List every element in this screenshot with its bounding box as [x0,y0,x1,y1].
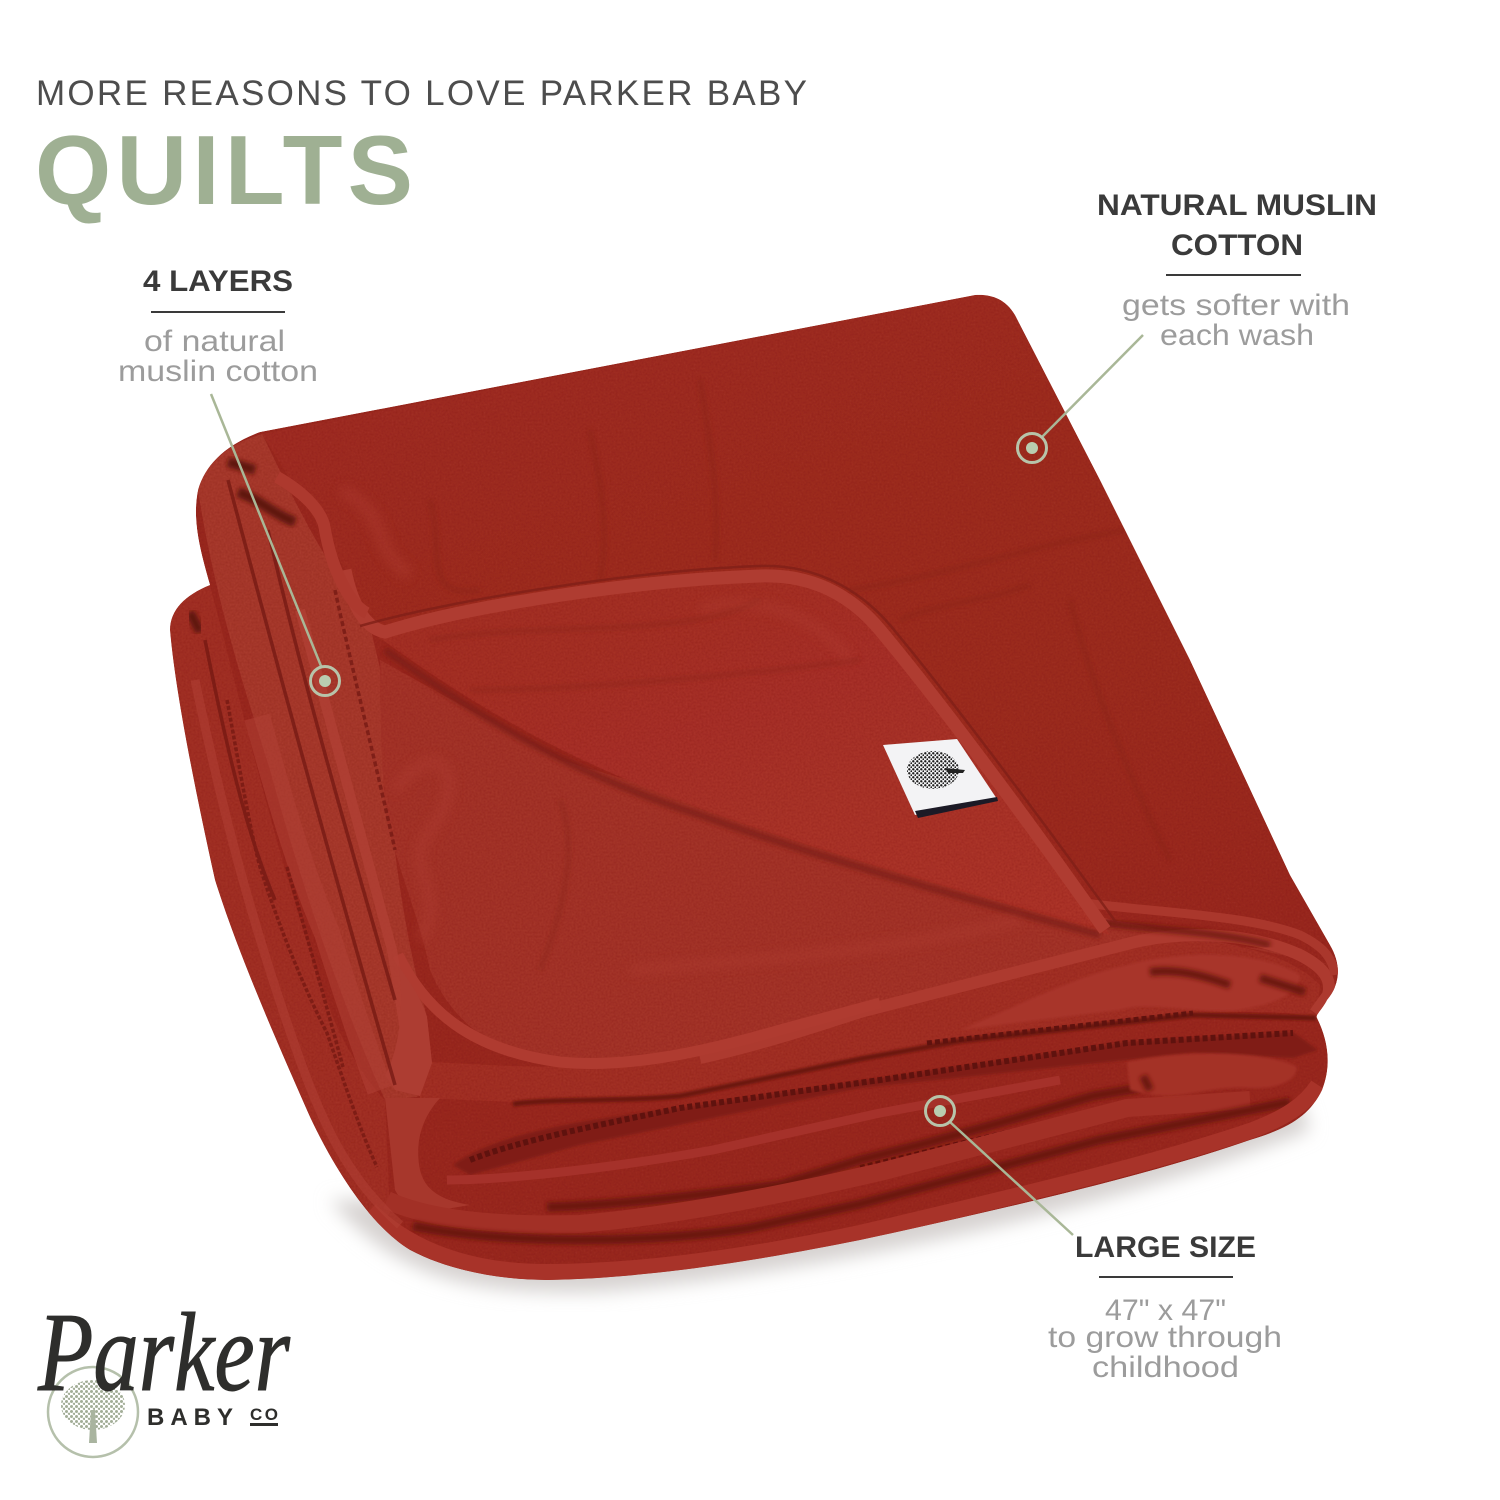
front fold piping [398,955,880,1064]
callout heading: LARGE SIZE [1075,1231,1256,1264]
flap piping seam [360,566,1118,925]
left stitched edge [277,477,367,613]
callout description: to grow through [1048,1321,1282,1354]
callout: large size [1048,1231,1282,1384]
shadow beneath flap [385,650,1100,935]
folded edge tab [385,965,432,1096]
title: quilts: QUILTS [35,115,413,225]
logo: Parker Baby Co [37,1291,290,1457]
top surface end piping [1085,903,1335,975]
logo circle [48,1367,138,1457]
loop shadows [1143,971,1305,1090]
folded flap [372,572,1110,935]
bottom hem [370,1085,1318,1272]
logo baby text: BABY [147,1404,233,1431]
callout description: gets softer with [1122,289,1350,322]
pointer: 4 layers [211,394,340,696]
left side layered edges [198,434,432,1100]
product image: folded red muslin quilt [170,295,1338,1292]
upper fold cavity [453,1032,1318,1175]
upper left fold cavity [228,462,295,522]
shadow below top end piping [1100,922,1270,945]
lower left fold stack [170,585,400,1225]
callout description: 47" x 47" [1105,1294,1226,1327]
label tag [883,739,997,815]
puckered ridges [340,490,1020,970]
blanket shadow [330,1100,1310,1292]
callout description: each wash [1160,319,1314,352]
label tag fold [915,797,998,818]
lower left fold cavity [190,612,200,632]
blanket clipped to silhouette [170,295,1338,1280]
callout description: muslin cotton [118,355,318,388]
left edge lighter bands [195,610,405,1225]
lower dark crease [547,1088,1140,1207]
bottom dark crease [413,1102,1290,1240]
callout heading: 4 LAYERS [143,265,293,298]
upper dark seam shadow [513,1015,1316,1104]
pointer: natural muslin cotton [1018,335,1143,462]
stitched band [387,1100,1250,1224]
header: more reasons to love: MORE REASONS TO LOVE PARKER BABY [36,74,807,113]
left fold stitching [205,480,395,1167]
pointer: large size [926,1096,1073,1235]
flap piping [345,570,1105,930]
lower fold front [386,1018,1328,1193]
upper right fold piping [700,935,1329,1058]
wrinkles on top surface [430,380,1170,970]
callout heading: NATURAL MUSLIN [1097,189,1377,222]
callout: 4 layers [118,265,318,388]
inner fold roll [447,1080,1060,1180]
logo tree [61,1380,125,1443]
callout description: of natural [144,325,285,358]
sewn-in label [883,739,998,818]
front fold band [420,941,1320,1102]
lower loop opening [1127,1053,1297,1096]
top surface of quilt [890,294,1330,946]
logo co text: CO [250,1405,278,1424]
callout description: childhood [1092,1351,1239,1384]
callout heading: COTTON [1171,229,1303,262]
callout: natural muslin cotton [1097,189,1377,352]
stitched seams [470,1013,1293,1167]
logo script wordmark: Parker [37,1291,290,1415]
blanket base silhouette [170,295,1338,1280]
upper loop opening [960,955,1300,1030]
label tree icon [907,751,965,789]
inner panel under flap [380,660,1330,1066]
lower-left fold corner [385,1098,470,1215]
fabric body with grain [170,295,1338,1280]
